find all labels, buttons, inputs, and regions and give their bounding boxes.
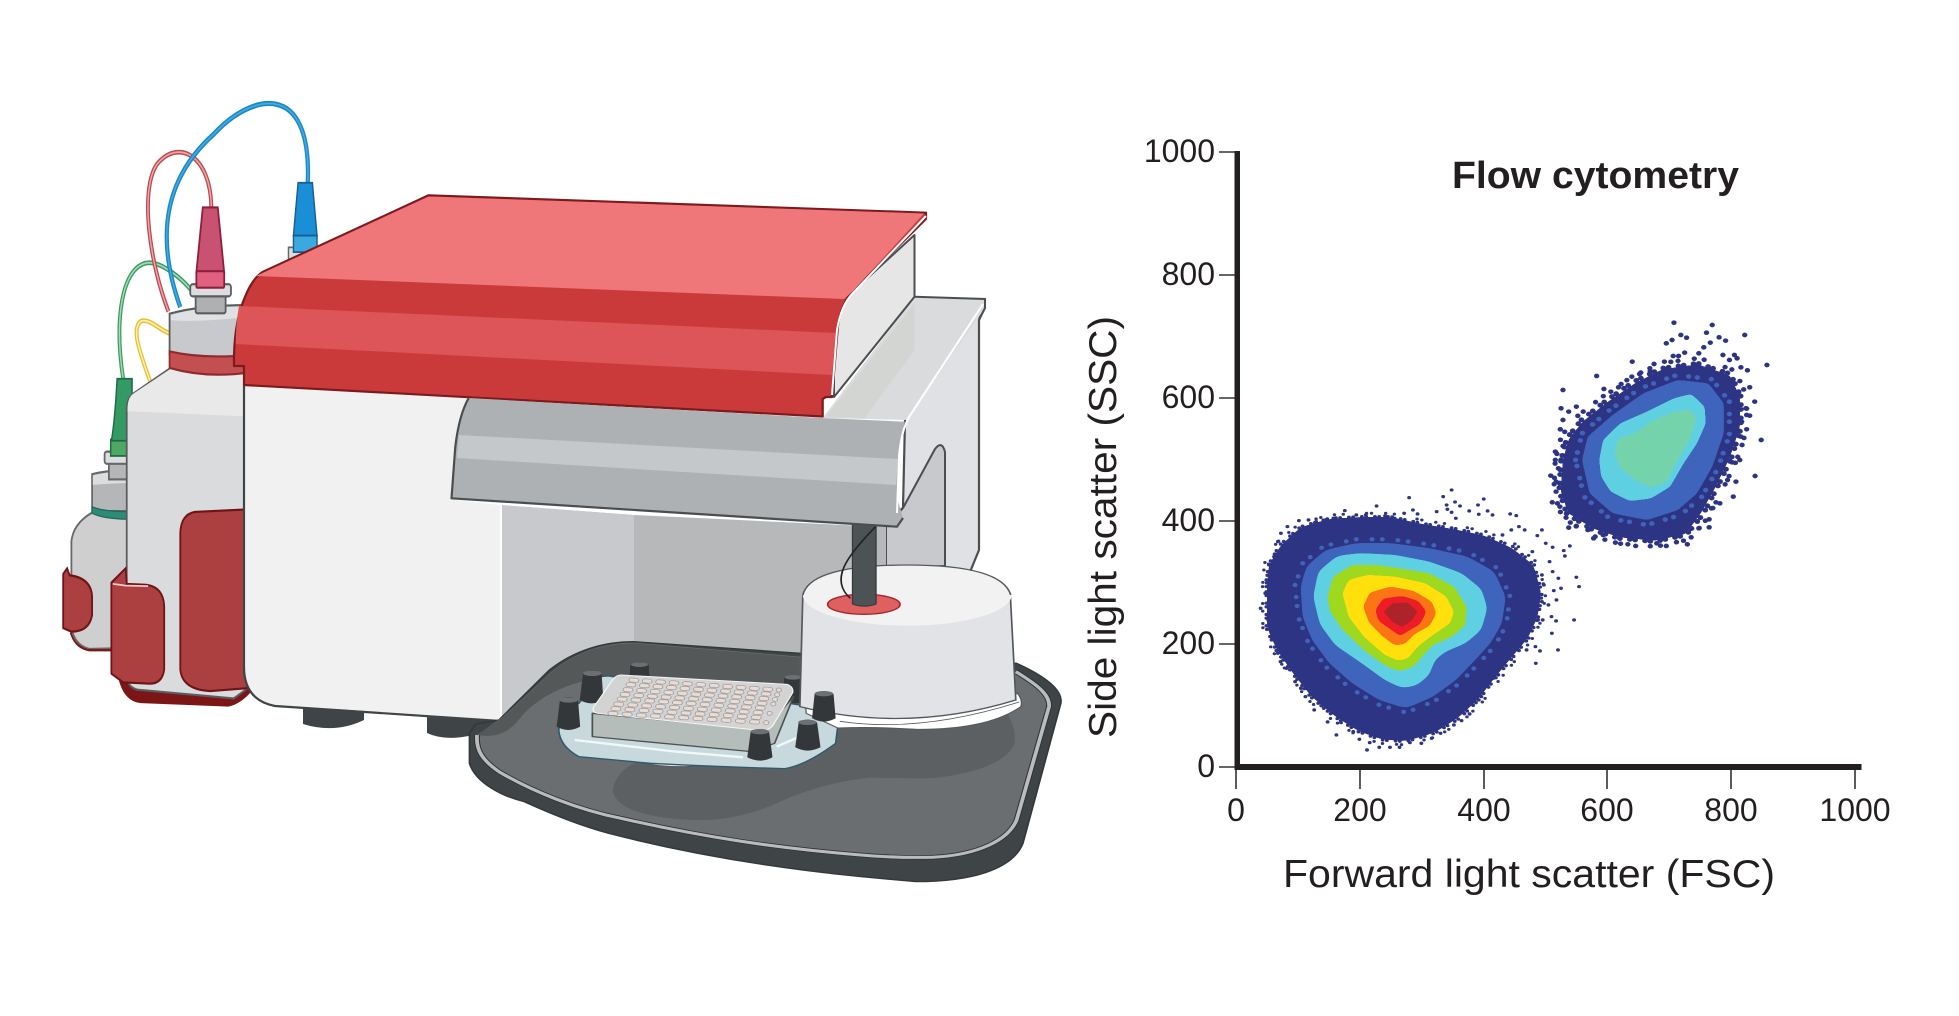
cup base flange [805,693,1021,729]
central body lighter panel [500,505,634,760]
left pegs [557,670,603,730]
y tick labels: 1000 [1144,133,1215,169]
x tick labels: 1000 [1819,792,1891,828]
y tick labels: 400 [1162,502,1215,538]
red port [828,594,900,614]
y tick labels: 800 [1162,256,1215,292]
probe rod [852,520,876,606]
x tick labels: 600 [1580,792,1634,828]
x axis title: Forward light scatter (FSC) [1283,853,1775,896]
bracket top surface [823,297,985,420]
y axis with ticks [1219,151,1237,770]
central body shaded recess [500,505,886,760]
arm white edge [897,304,983,513]
tray rim [477,672,1049,857]
main body edge highlight [500,505,502,720]
sample stage tray and plate [469,520,1061,882]
x tick labels: 800 [1704,792,1758,828]
bracket top inner shade [826,303,914,418]
tray cast shadow [613,708,1015,820]
tube: yellow [137,321,170,381]
large bottle [111,207,255,707]
tube: red [148,152,211,312]
right cluster green contour [1615,410,1696,488]
left cluster peak [1386,604,1416,625]
x tick labels: 0 [1227,792,1245,828]
body feet [303,707,490,738]
arm front housing [452,398,905,527]
cup top [803,564,1012,626]
blue nozzle [288,183,321,260]
arm lighter band [457,435,898,485]
main body outline [244,385,500,721]
plate holder highlight [575,730,815,757]
disc under plate holder [625,737,735,767]
arm outline [452,398,903,527]
left cluster orange contour [1363,587,1436,645]
tray back shadow [477,643,800,736]
right cluster fuzzy edge, inner ring [1559,363,1741,542]
x tick labels: 400 [1457,792,1511,828]
left cluster red contour [1375,596,1426,636]
tube: green [119,263,191,379]
y axis title: Side light scatter (SSC) [1082,316,1125,738]
plate holder [559,676,838,769]
96-well plate [592,675,794,752]
tray surface [477,643,1049,857]
y tick labels: 200 [1162,625,1215,661]
tray base [469,642,1061,882]
left cluster green contour [1328,565,1467,671]
wells [610,680,779,723]
right cluster medium-blue dotted edge [1576,375,1729,525]
front pegs [747,691,836,761]
right cluster cyan contour [1599,394,1706,501]
flow cytometer instrument illustration [63,103,1061,882]
left cluster yellow contour [1343,575,1454,661]
back pegs [629,662,804,703]
instrument lid [234,195,926,416]
chart title: Flow cytometry [1452,155,1739,197]
left cluster outer density [1267,517,1541,741]
y axis line [1234,151,1240,770]
bracket inner shade [886,445,945,568]
left cluster fuzzy edge, inner ring [1266,517,1542,742]
right cluster medium-blue density [1582,380,1724,520]
y tick labels: 0 [1197,748,1215,784]
left cluster outlier events [1261,490,1579,750]
right cluster outer density [1561,364,1740,541]
y tick labels [1144,133,1215,784]
x axis with ticks [1236,770,1855,789]
x axis line [1234,764,1862,770]
bracket side panel [886,302,985,572]
cup top outline [803,565,1011,595]
right cluster fuzzy edge, outer ring [1554,358,1747,547]
left cluster [1261,490,1579,750]
left cluster fuzzy edge, outer ring [1263,513,1546,745]
x tick labels [1227,792,1891,828]
lid side panel [834,235,914,397]
scatter density clusters [1261,323,1767,750]
probe wire [841,527,876,598]
y tick labels: 600 [1162,379,1215,415]
flow cytometry scatter plot [1082,133,1891,896]
x tick labels: 200 [1333,792,1387,828]
tubing and reagent bottles [63,103,321,707]
cup body [800,595,1016,718]
right cluster outlier events [1551,323,1767,546]
cup flange inner line [840,702,1019,725]
right cluster [1551,323,1767,547]
bracket top outline [914,297,985,320]
small bottle [63,379,143,650]
main body front panel [244,385,500,721]
left cluster medium-blue dotted edge [1295,539,1510,713]
well rims [610,680,779,723]
tube: blue [167,103,308,307]
left cluster cyan contour [1313,553,1487,688]
left cluster medium-blue density [1301,543,1506,708]
